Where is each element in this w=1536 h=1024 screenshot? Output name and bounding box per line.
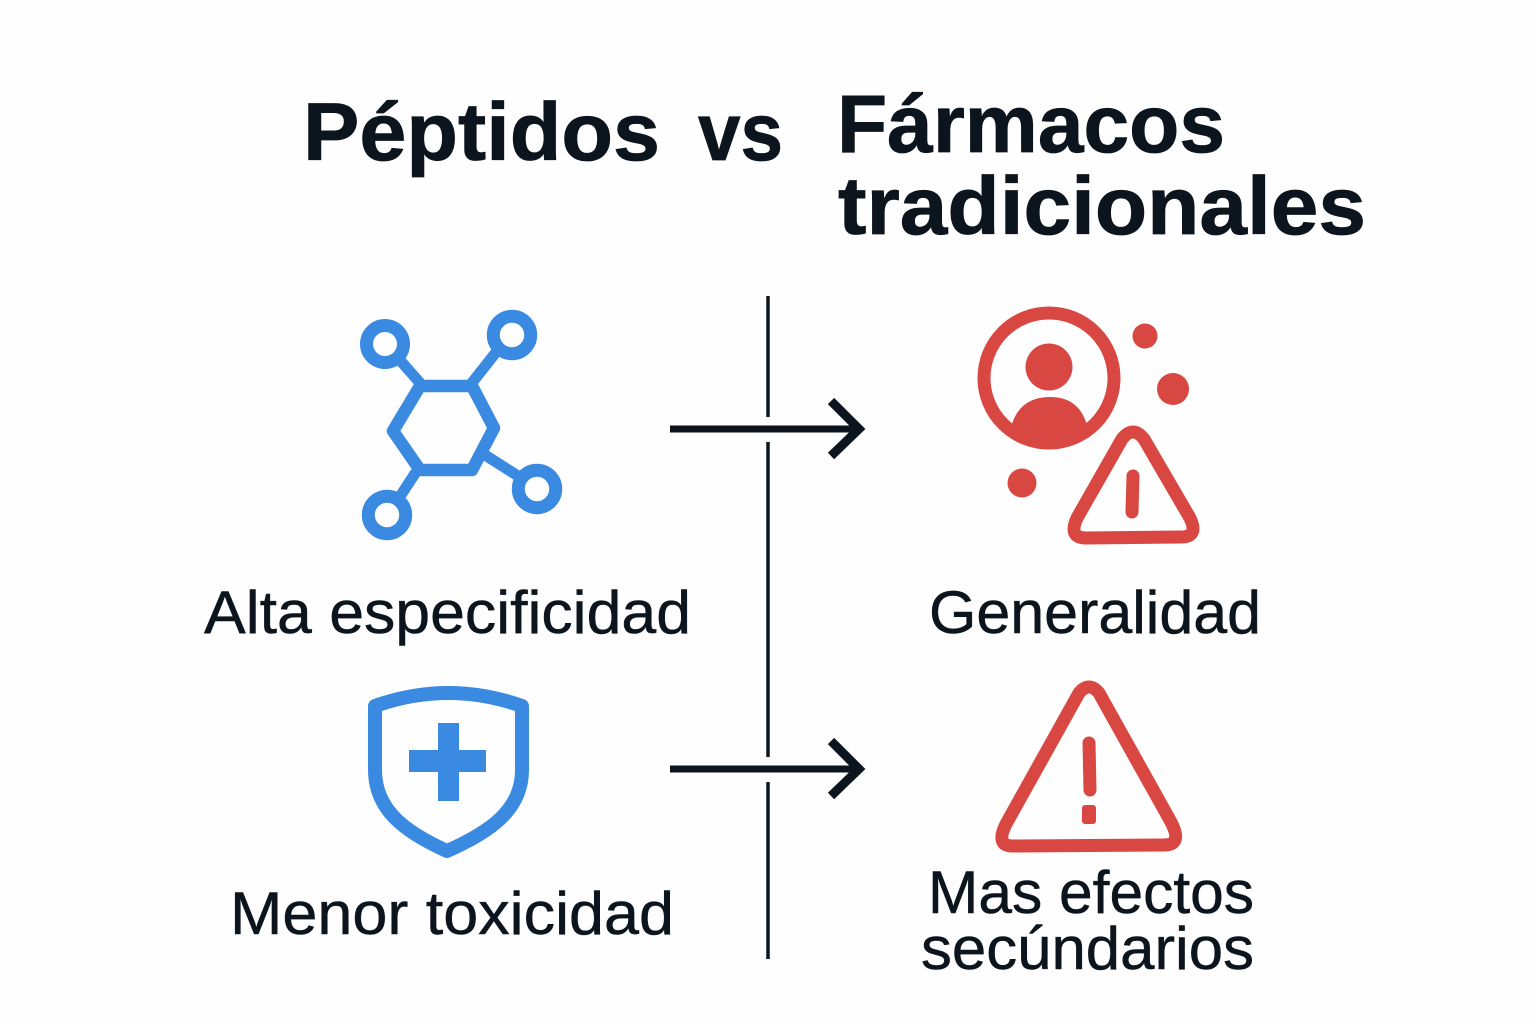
label: generalidad: Generalidad	[929, 579, 1261, 646]
label: mas efectos secundarios: secúndarios	[921, 915, 1254, 982]
title: tradicionales	[838, 161, 1366, 252]
central divider	[766, 296, 770, 959]
label: alta especificidad: Alta especificidad	[204, 579, 691, 646]
title: vs	[698, 87, 783, 178]
arrow: specificity comparison	[670, 401, 859, 456]
title: Péptidos	[303, 87, 660, 178]
label: menor toxicidad: Menor toxicidad	[230, 880, 674, 947]
icon: patient with side effects	[984, 313, 1193, 538]
label: mas efectos secundarios	[921, 859, 1254, 982]
arrow: toxicity comparison	[670, 741, 859, 796]
title: Fármacos	[837, 79, 1225, 170]
icon: shield with cross	[375, 693, 522, 851]
label: mas efectos secundarios: Mas efectos	[928, 859, 1254, 926]
icon: peptide molecule	[366, 316, 556, 534]
icon: warning triangle	[1002, 687, 1176, 846]
title	[303, 79, 1366, 252]
